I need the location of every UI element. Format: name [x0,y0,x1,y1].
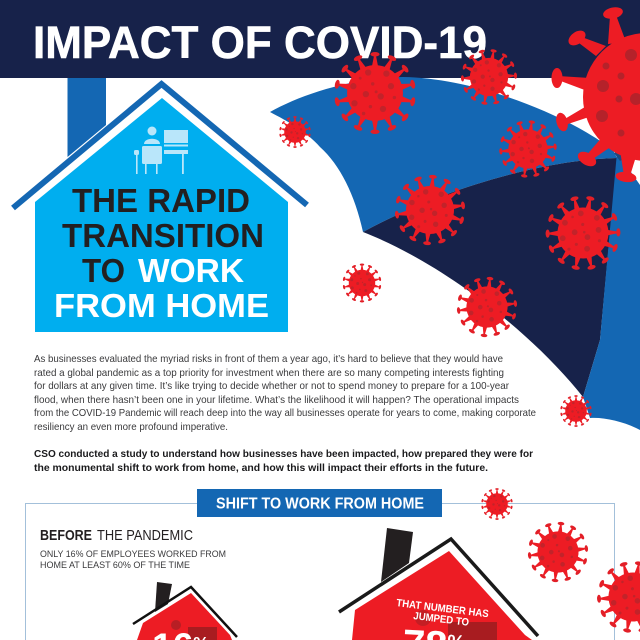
before the pandemic heading [40,527,193,544]
virus: small white gap [343,264,381,302]
section heading banner [197,489,442,517]
section heading banner: SHIFT TO WORK FROM HOME [216,496,424,512]
house heading: TO [82,253,125,290]
intro paragraph: for dollars at any given time. It’s like trying to decide whether or not to spend money to prepare for a 100-year [34,381,510,392]
top banner [0,0,640,78]
house callout text: THAT NUMBER HAS [396,597,489,620]
intro paragraph: rated a global pandemic as a top priority for investment when there are so many competing interests fighting [34,368,504,379]
large red house: 78% [339,528,538,640]
virus: umbrella lower edge [454,274,520,340]
intro paragraph: As businesses evaluated the myriad risks in front of them a year ago, it’s hard to believe that they would have [34,354,503,365]
house heading: TRANSITION [62,218,264,255]
bold study summary: CSO conducted a study to understand how businesses have been impacted, how prepared they were for [34,449,533,460]
title: IMPACT OF COVID-19 [33,17,487,68]
virus: navy panel [539,189,627,277]
house: work from home [13,78,307,332]
before the pandemic description: HOME AT LEAST 60% OF THE TIME [40,560,190,571]
virus: upper large [334,52,416,134]
house heading: THE RAPID [72,183,250,220]
house heading: WORK [138,253,244,290]
before the pandemic heading: BEFORE [40,527,92,544]
before the pandemic heading: THE PANDEMIC [97,527,193,544]
virus: small left [279,116,311,148]
before the pandemic description [40,549,226,571]
intro paragraph [34,354,536,433]
virus: umbrella middle [392,172,468,248]
bold study summary [34,449,533,474]
house heading: FROM HOME [54,288,269,325]
bold study summary: the monumental shift to work from home, and how this will impact their efforts in the future. [34,463,488,474]
virus: umbrella right [495,116,561,182]
house heading [54,183,269,325]
umbrella illustration [270,77,640,430]
intro paragraph: resiliency an even more profound imperative. [34,422,228,433]
virus: giant top right [552,6,640,183]
virus: umbrella tip [560,395,592,427]
house callout text: JUMPED TO [413,610,470,629]
intro paragraph: from the COVID-19 Pandemic will reach deep into the way all businesses operate for years to come, making corporate [34,408,536,419]
virus: box far right [591,555,640,639]
virus: top centre [456,44,522,110]
icon: person at desk [134,126,188,174]
virus: on box border [481,488,513,520]
house callout text [396,597,489,640]
before the pandemic description: ONLY 16% OF EMPLOYEES WORKED FROM [40,549,226,560]
virus: box right [525,519,591,585]
intro paragraph: flood, when there hasn’t been one in your lifetime. What’s the likelihood it will happen? The operational impacts [34,395,519,406]
small red house: 16% [133,582,237,640]
